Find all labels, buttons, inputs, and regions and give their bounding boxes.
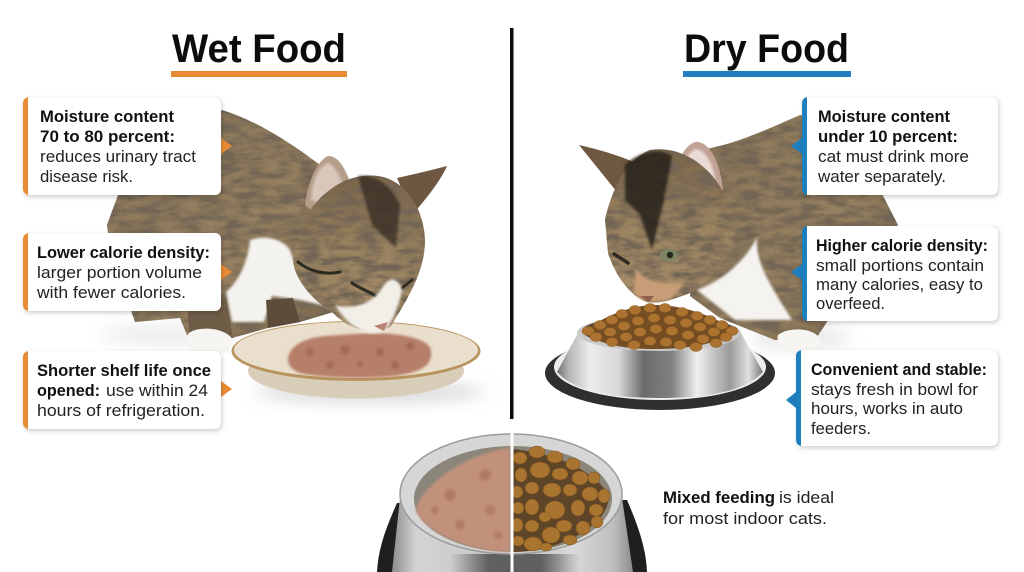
dark head markings <box>358 176 400 248</box>
card: wet moisture: disease risk. <box>40 168 133 186</box>
right ear <box>397 166 447 214</box>
orange underline <box>171 71 347 77</box>
white paw <box>188 329 233 354</box>
card: dry convenience: feeders. <box>811 420 871 438</box>
far leg <box>266 298 300 328</box>
cat eating dry food <box>579 115 898 354</box>
muzzle <box>634 268 684 302</box>
body <box>107 110 345 338</box>
nose <box>374 322 388 331</box>
card: wet shelf life: opened: <box>37 382 100 400</box>
mixed feeding caption: Mixed feeding <box>663 489 775 507</box>
card: dry calories: overfeed. <box>816 295 885 313</box>
bowl side <box>392 498 633 572</box>
title: wet food: Wet Food <box>172 27 346 71</box>
mixed feeding bowl <box>377 433 647 572</box>
card: wet calories: Lower calorie density: <box>37 244 210 262</box>
card: dry convenience <box>786 350 998 446</box>
card: wet moisture <box>23 97 232 195</box>
dry kibble half <box>511 446 610 551</box>
left ear <box>305 156 358 225</box>
plate rim <box>232 321 480 381</box>
right ear <box>673 142 723 190</box>
card: dry moisture <box>791 97 998 195</box>
card: dry moisture: water separately. <box>817 168 946 186</box>
white center split <box>510 433 514 572</box>
dark head stripe <box>625 151 672 250</box>
blue underline <box>683 71 851 77</box>
card: dry calories: small portions contain <box>816 257 984 275</box>
eyes <box>660 249 678 261</box>
floor shadow <box>750 328 850 348</box>
plate of wet food <box>232 321 485 402</box>
card: dry convenience: stays fresh in bowl for <box>811 381 979 399</box>
kibble backing <box>512 449 609 552</box>
nose <box>640 296 654 302</box>
white muzzle <box>335 280 402 333</box>
bowl rim <box>400 434 622 554</box>
card: wet shelf life: use within 24 <box>106 382 208 400</box>
kibble mound <box>584 305 735 349</box>
wet food <box>288 333 431 378</box>
card: dry calories <box>791 226 998 321</box>
cat head eating wet food <box>293 156 447 333</box>
mixed feeding caption: is ideal <box>779 489 834 507</box>
head <box>293 176 425 331</box>
card: wet shelf life: hours of refrigeration. <box>37 402 205 420</box>
title: dry food: Dry Food <box>684 27 849 71</box>
card: wet calories: larger portion volume <box>37 264 202 282</box>
left ear <box>579 145 640 192</box>
card: wet calories <box>23 233 232 311</box>
dry food bowl <box>545 304 775 410</box>
center divider <box>510 28 514 419</box>
floor shadow <box>100 325 240 345</box>
mixed feeding caption <box>663 489 834 528</box>
front leg <box>187 298 233 338</box>
black bowl base <box>377 500 647 572</box>
card: dry convenience: Convenient and stable: <box>811 361 987 379</box>
bowl rim <box>577 315 741 351</box>
card: wet calories: with fewer calories. <box>36 284 186 302</box>
card: wet moisture: Moisture content <box>40 108 175 126</box>
card: wet shelf life: Shorter shelf life once <box>37 362 211 380</box>
closed eyes <box>298 262 412 298</box>
card: dry moisture: under 10 percent: <box>818 128 958 146</box>
card: dry moisture: cat must drink more <box>818 148 969 166</box>
white paw <box>778 329 821 354</box>
plate shadow <box>255 382 485 402</box>
head <box>605 149 735 303</box>
bowl side <box>557 333 763 398</box>
cat body eating wet food <box>100 110 345 354</box>
kibble <box>582 304 738 352</box>
card: dry calories: many calories, easy to <box>816 276 983 294</box>
card: wet moisture: reduces urinary tract <box>40 148 196 166</box>
card: dry convenience: hours, works in auto <box>811 400 963 418</box>
bowl base rim <box>545 336 775 410</box>
body <box>690 115 898 340</box>
dark reflection <box>450 554 580 572</box>
card: dry moisture: Moisture content <box>818 108 951 126</box>
card: dry calories: Higher calorie density: <box>816 237 988 255</box>
card: wet shelf life <box>23 351 232 429</box>
wet food half <box>416 448 510 552</box>
white chest <box>226 238 335 322</box>
white chest <box>697 237 792 320</box>
card: wet moisture: 70 to 80 percent: <box>40 128 175 146</box>
plate underside <box>248 344 464 398</box>
mixed feeding caption: for most indoor cats. <box>663 510 827 528</box>
